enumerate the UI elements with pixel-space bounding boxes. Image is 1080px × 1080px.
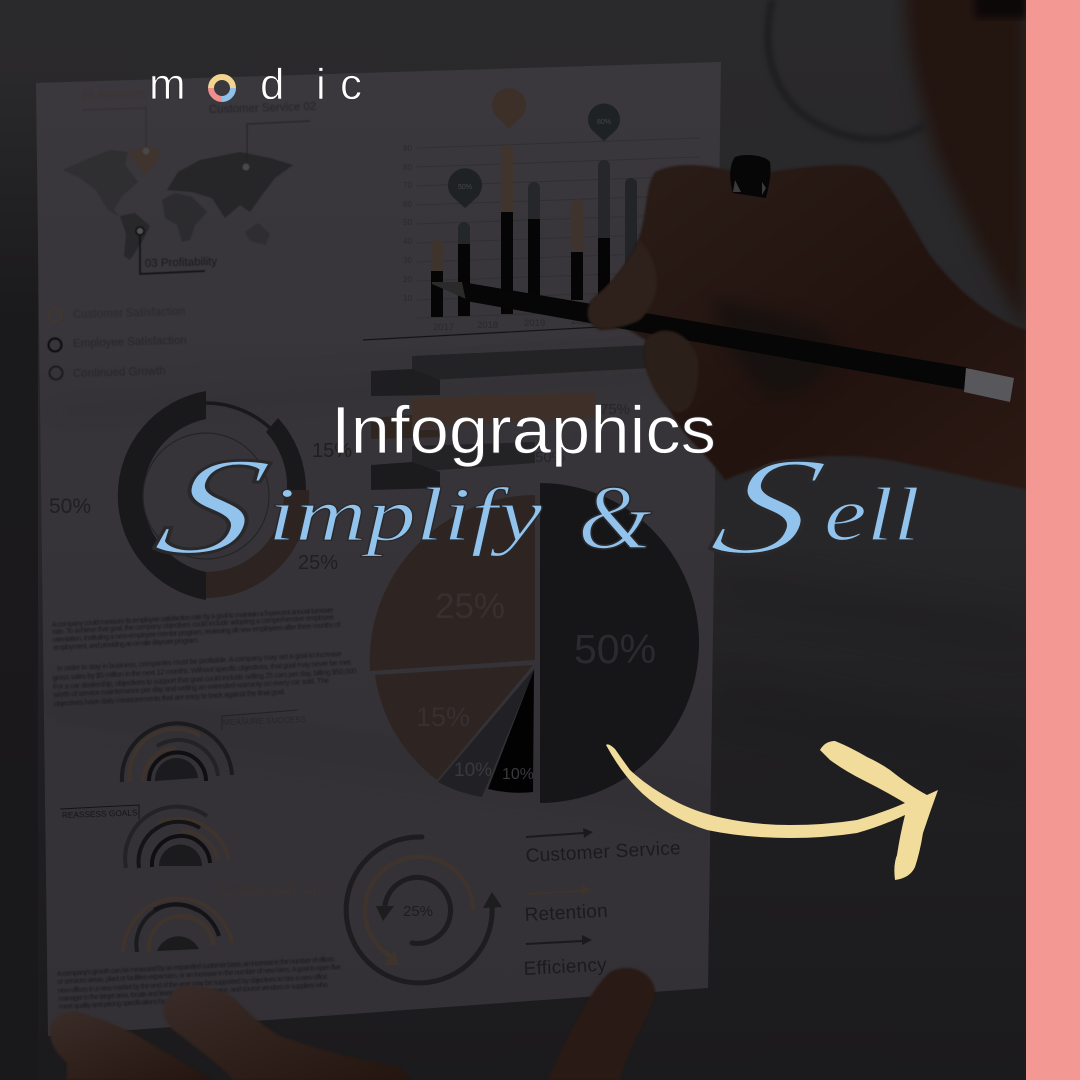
chart axis labels: 40 — [403, 237, 412, 246]
paragraph block 1: employment, and providing an on-site daycare program. — [53, 635, 199, 652]
lower left finger one — [50, 1012, 213, 1080]
kpi arrow: efficiency — [526, 935, 592, 945]
arrow — [606, 741, 938, 880]
continent: Africa — [162, 193, 207, 242]
continent: Australia — [245, 223, 270, 245]
arc graphic: third goal — [123, 884, 324, 952]
ring — [730, 155, 771, 198]
ribbon bar brown — [412, 393, 596, 428]
chart axis labels: 70 — [403, 181, 412, 190]
chart pin orange — [492, 88, 526, 129]
left dark strip — [0, 70, 38, 1080]
arc graphic: measure success — [122, 710, 307, 782]
donut label 50%: 50% — [49, 495, 91, 518]
chart axis labels: 10 — [403, 294, 412, 303]
ampersand: & — [578, 466, 652, 568]
chart axis labels: 30 — [403, 256, 412, 265]
holding hand, lower left — [50, 985, 410, 1080]
label: reassess goals: REASSESS GOALS — [62, 807, 138, 820]
map label 02 — [209, 101, 316, 170]
paragraph block 3: meet quality and pricing specifications by a — [58, 996, 171, 1011]
pencil eraser band — [964, 368, 1014, 402]
label 75%: 75% — [600, 401, 630, 418]
donut chart — [49, 391, 352, 600]
paragraph block 1 — [52, 605, 341, 652]
logo: modic: m o dic — [149, 60, 362, 109]
chart axis labels: 90 — [403, 144, 412, 153]
continent: Eurasia — [167, 152, 293, 218]
map label 01: 01 Retention — [82, 88, 147, 102]
chart year labels: 2019 — [524, 318, 545, 329]
pie slice 10% grey — [438, 668, 535, 797]
donut dark arc 15% — [266, 418, 306, 490]
paragraph block 2: objectives have daily measurements that are easy to track against the final goal. — [54, 687, 286, 708]
shadow stripes on wall — [720, 570, 1026, 780]
chart bars — [431, 145, 637, 317]
map label 03: 03 Profitability — [145, 256, 218, 270]
chart baseline — [363, 327, 600, 340]
hand and wrist — [589, 165, 1026, 489]
label 25%: 25% — [403, 903, 433, 920]
large initial S of Sell: S — [696, 428, 841, 584]
chart pin 80% — [588, 104, 620, 141]
legend item: Employee Satisfaction: Employee Satisfaction — [73, 335, 187, 350]
chart axis labels: 80 — [403, 163, 412, 172]
pie label 15%: 15% — [416, 702, 470, 732]
large initial S of Simplify: S — [140, 428, 285, 584]
ribbon bar dark lower — [412, 442, 535, 472]
paragraph block 1: A company could measure its employee satisfaction rate by a goal to maintain a 5-percent annual turnover — [52, 605, 334, 629]
label: third goal — [222, 884, 324, 902]
pie chart — [370, 483, 699, 803]
donut thin arc — [206, 403, 271, 429]
rest of Sell: ell — [824, 473, 920, 557]
label: third goal: ESTABLISH GOAL POWER — [224, 887, 324, 899]
paragraph block 3: or services areas, plant or facilities expansion, or an increase in the number of new hires. A goal to open five — [57, 962, 341, 986]
bar chart — [363, 88, 700, 340]
kpi arrow: retention — [526, 885, 592, 895]
paragraph block 2: gross sales by $5 million in the next 12 months. Without specific objectives, that goal may never be met. — [52, 657, 352, 682]
pie label 25%: 25% — [435, 587, 505, 626]
paragraph block 2: For a car dealership, objectives to support that goal could include selling 25 cars per day, billing $50,000 — [53, 666, 357, 691]
hand holding pencil — [432, 155, 1026, 489]
outer arrow ring — [346, 837, 492, 983]
legend item: Customer Satisfaction: Customer Satisfaction — [73, 306, 186, 321]
holding hand, lower right — [547, 968, 655, 1080]
logo ring o — [211, 77, 233, 99]
middle arrow ring — [365, 857, 473, 958]
map label 02: Customer Service 02 — [209, 101, 316, 116]
panel: paper sheet — [36, 62, 721, 1036]
title: Infographics: Infographics — [331, 393, 716, 468]
map label 03 — [136, 227, 218, 274]
map label 01 — [82, 88, 150, 154]
paragraph block 3: new offices in a new market by the end of the year may be supported by objectives to hire a new office — [58, 972, 328, 995]
kpi label: efficiency: Efficiency — [523, 955, 608, 980]
paragraph block 2: In order to stay in business, companies must be profitable. A company may set a goal to increase — [57, 649, 342, 673]
chart pin 50% — [448, 168, 482, 208]
paragraph block 1: rate. To achieve that goal, the company objectives could include adopting a comprehensive employee — [52, 612, 334, 636]
pink side bar — [1026, 0, 1080, 1080]
chart grid — [417, 138, 700, 318]
glasses frame — [768, 0, 925, 139]
knuckle shadow — [715, 300, 836, 395]
inner arrow ring — [385, 877, 451, 943]
pie label 10% black: 10% — [502, 766, 534, 783]
rest of Simplify: implify — [268, 473, 542, 557]
paragraph block 3: manager in the target area, locate and lease suitable office space, and source vendors or suppliers who — [58, 980, 328, 1003]
chart year labels — [433, 316, 592, 333]
kpi label: customer service: Customer Service — [525, 838, 681, 867]
paragraph block 2 — [51, 648, 358, 708]
donut inner ring — [143, 433, 269, 559]
chart axis labels: 60 — [403, 200, 412, 209]
circular arrows graphic — [346, 837, 502, 983]
script title: Simplify & Sell — [140, 428, 920, 584]
label: measure success — [222, 710, 307, 730]
legend — [48, 306, 187, 380]
chart pin 80%: 80% — [597, 119, 611, 126]
pie slice 50% — [540, 483, 699, 803]
lower left finger two — [163, 985, 410, 1080]
donut label 15%: 15% — [312, 440, 352, 462]
continent: Greenland — [127, 147, 160, 175]
middle finger — [644, 330, 698, 412]
paragraph block 1: orientation, instituting a new-employee mentor program, reviewing all new employees after three months of — [52, 620, 341, 644]
kpi arrow: customer service — [526, 828, 593, 838]
person's face and glasses — [768, 0, 1026, 330]
pie label 50%: 50% — [574, 626, 656, 672]
face — [905, 0, 1026, 330]
paragraph block 2: worth of service maintenance per day and writing an extended warranty on every car sold. The — [52, 676, 329, 699]
donut label 25%: 25% — [298, 552, 338, 574]
arc graphic: reassess goals — [60, 805, 229, 868]
chart year labels: 2018 — [477, 320, 498, 331]
label: measure success: MEASURE SUCCESS — [223, 714, 307, 727]
kpi list — [523, 828, 681, 980]
paragraph block 3: A company's growth can be measured by an expanded customer base, an increase in the number of offices — [57, 954, 335, 978]
kpi label: retention: Retention — [524, 901, 608, 926]
chart axis labels: 20 — [403, 275, 412, 284]
dark shadow top right — [975, 0, 1026, 18]
pie label 10% grey: 10% — [454, 760, 492, 781]
thumb — [588, 240, 657, 328]
pie slice 25% — [370, 495, 535, 671]
pie slice 10% black — [488, 670, 534, 793]
chart year labels: 2017 — [433, 322, 454, 333]
chart pin 50%: 50% — [458, 184, 472, 191]
paragraph block 3 — [57, 954, 342, 1011]
donut dark arc 50% — [118, 391, 206, 600]
pencil — [432, 282, 1014, 402]
pie slice 15% — [375, 665, 533, 780]
donut brown arc 25% — [206, 490, 309, 598]
legend item: Continued Growth: Continued Growth — [73, 365, 166, 380]
continent: South America — [120, 213, 150, 260]
chart year labels: 2020 — [571, 316, 592, 327]
label 50% bar: 50% — [535, 449, 565, 466]
continent: North America — [63, 150, 138, 217]
paper shadow stripes — [40, 360, 720, 815]
chart axis labels: 50 — [403, 218, 412, 227]
ribbon bars — [371, 345, 650, 490]
ribbon bar dark top — [412, 345, 650, 381]
chart axis labels — [403, 144, 412, 303]
world map — [63, 147, 293, 260]
